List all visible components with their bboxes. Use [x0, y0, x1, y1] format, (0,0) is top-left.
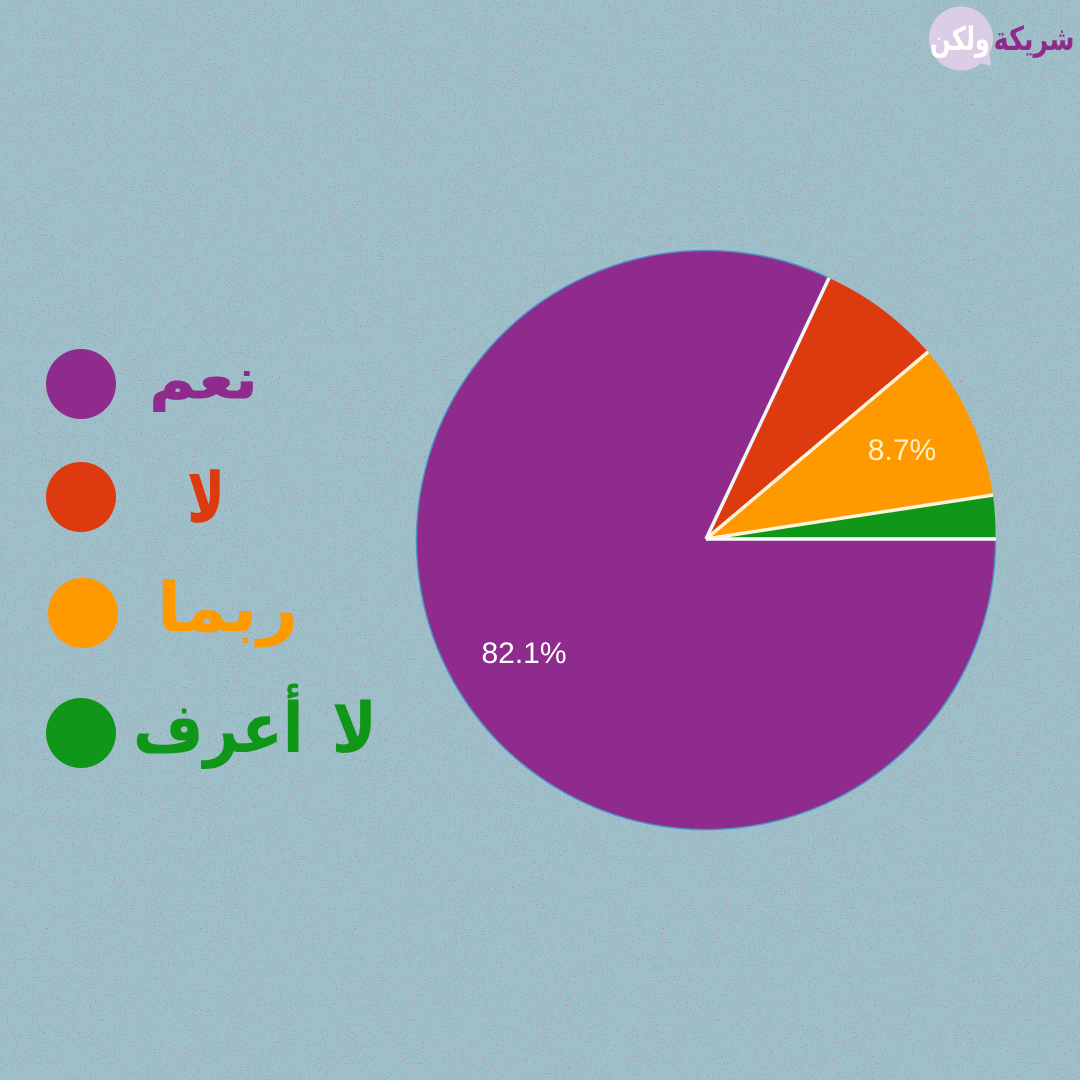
slice separators: [706, 278, 996, 539]
label: 82.1%: 82.1%: [481, 637, 567, 670]
legend item: no: [46, 459, 224, 537]
logo text: purple word: شريكة: [994, 20, 1074, 58]
slice: don't know: [706, 495, 996, 539]
slice: no: [706, 278, 928, 539]
legend item: no: لا: [188, 459, 224, 537]
legend item: maybe: [48, 569, 298, 648]
legend item: yes: [46, 347, 258, 419]
logo: [929, 6, 1074, 70]
legend item: don't know: [46, 683, 377, 769]
slice: yes 82.1%: [417, 251, 996, 830]
legend: [46, 347, 377, 769]
logo bubble: [929, 6, 993, 70]
label: 8.7%: 8.7%: [868, 434, 936, 467]
legend item: don't know: لا أعرف: [133, 683, 377, 769]
pie chart: [417, 251, 996, 830]
legend item: maybe: ربما: [157, 569, 298, 648]
legend item: yes: نعم: [149, 347, 258, 412]
slice: maybe: [706, 352, 993, 539]
logo text: white word: ولكن: [930, 19, 990, 58]
